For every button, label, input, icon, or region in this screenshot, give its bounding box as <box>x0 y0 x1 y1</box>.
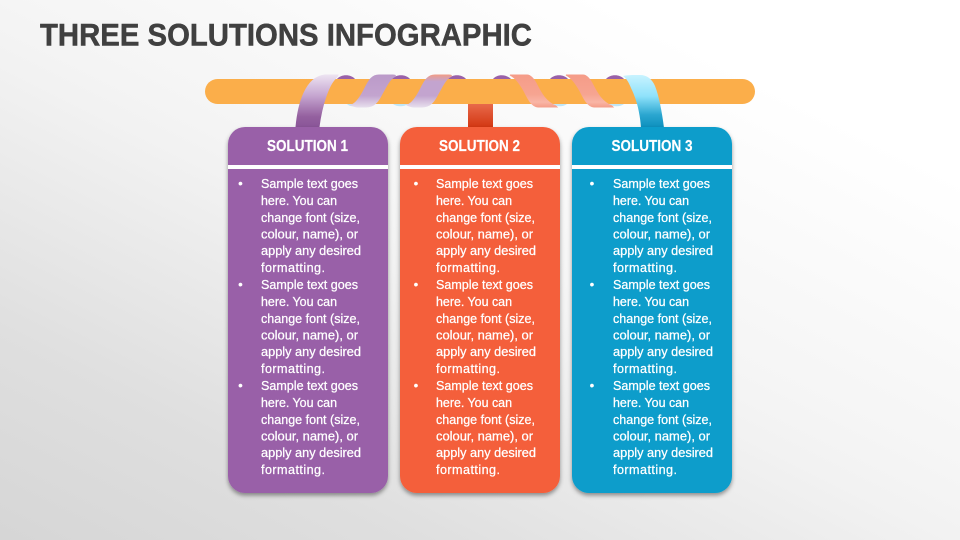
body text: Sample text goes <box>436 379 533 393</box>
body text: apply any desired <box>261 345 361 359</box>
body text: change font (size, <box>261 312 360 326</box>
heading: SOLUTION 1 <box>267 138 348 155</box>
body text: here. You can <box>261 295 337 309</box>
body text: colour, name), or <box>613 328 710 342</box>
bullets <box>590 175 594 393</box>
bullets: • <box>590 377 594 393</box>
panel: solution 2 <box>400 127 560 493</box>
body text: colour, name), or <box>436 430 533 444</box>
body text: apply any desired <box>436 446 536 460</box>
body text: change font (size, <box>613 211 712 225</box>
bullets: • <box>590 276 594 292</box>
body text: Sample text goes <box>261 379 358 393</box>
body text: change font (size, <box>613 413 712 427</box>
body text: apply any desired <box>261 244 361 258</box>
body text: colour, name), or <box>261 328 358 342</box>
body text: formatting. <box>436 261 500 275</box>
body text: Sample text goes <box>261 177 358 191</box>
body text: apply any desired <box>261 446 361 460</box>
bullets: • <box>590 175 594 191</box>
bullets <box>414 175 418 393</box>
divider <box>400 165 560 169</box>
body text: Sample text goes <box>613 278 710 292</box>
body text: here. You can <box>436 295 512 309</box>
body text: Sample text goes <box>613 177 710 191</box>
bullets: • <box>414 377 418 393</box>
bullets <box>238 175 243 393</box>
body text: Sample text goes <box>613 379 710 393</box>
body text: colour, name), or <box>613 228 710 242</box>
body text: colour, name), or <box>436 328 533 342</box>
card background <box>400 127 560 493</box>
ribbon 2 stem <box>468 104 493 128</box>
panel: solution 1 <box>228 127 388 493</box>
body text: here. You can <box>436 396 512 410</box>
body text: apply any desired <box>436 345 536 359</box>
body text: change font (size, <box>613 312 712 326</box>
body text: Sample text goes <box>436 278 533 292</box>
body text: here. You can <box>261 194 337 208</box>
body text <box>436 177 536 477</box>
body text: here. You can <box>613 396 689 410</box>
body text: formatting. <box>613 261 677 275</box>
body text: colour, name), or <box>613 430 710 444</box>
body text: formatting. <box>261 362 325 376</box>
bullets: • <box>238 377 243 393</box>
body text <box>613 177 713 477</box>
bullets: • <box>238 175 243 191</box>
body text: colour, name), or <box>261 228 358 242</box>
body text: formatting. <box>261 261 325 275</box>
body text: change font (size, <box>261 413 360 427</box>
card background <box>228 127 388 493</box>
body text: formatting. <box>436 463 500 477</box>
body text: formatting. <box>613 463 677 477</box>
ribbon 3: blue coil <box>623 75 664 128</box>
body text: here. You can <box>613 194 689 208</box>
body text: change font (size, <box>436 413 535 427</box>
body text: Sample text goes <box>436 177 533 191</box>
body text <box>261 177 361 477</box>
heading: SOLUTION 3 <box>612 138 693 155</box>
bullets: • <box>414 276 418 292</box>
horizontal orange bar <box>205 79 755 104</box>
divider <box>228 165 388 169</box>
body text: change font (size, <box>436 211 535 225</box>
body text: colour, name), or <box>436 228 533 242</box>
title: THREE SOLUTIONS INFOGRAPHIC <box>40 16 532 52</box>
body text: here. You can <box>261 396 337 410</box>
bullets: • <box>238 276 243 292</box>
ribbon 1: purple coil <box>296 75 451 127</box>
body text: apply any desired <box>436 244 536 258</box>
body text: here. You can <box>613 295 689 309</box>
body text: change font (size, <box>261 211 360 225</box>
body text: colour, name), or <box>261 430 358 444</box>
body text: formatting. <box>261 463 325 477</box>
body text: apply any desired <box>613 244 713 258</box>
body text: Sample text goes <box>261 278 358 292</box>
panel: solution 3 <box>572 127 732 493</box>
body text: formatting. <box>613 362 677 376</box>
body text: apply any desired <box>613 345 713 359</box>
body text: change font (size, <box>436 312 535 326</box>
bullets: • <box>414 175 418 191</box>
body text: here. You can <box>436 194 512 208</box>
ribbon 2: orange coil <box>510 75 613 107</box>
body text: formatting. <box>436 362 500 376</box>
divider <box>572 165 732 169</box>
card background <box>572 127 732 493</box>
body text: apply any desired <box>613 446 713 460</box>
ribbon back pieces: purple caps and light blue peeks <box>337 75 624 106</box>
heading: SOLUTION 2 <box>439 138 520 155</box>
